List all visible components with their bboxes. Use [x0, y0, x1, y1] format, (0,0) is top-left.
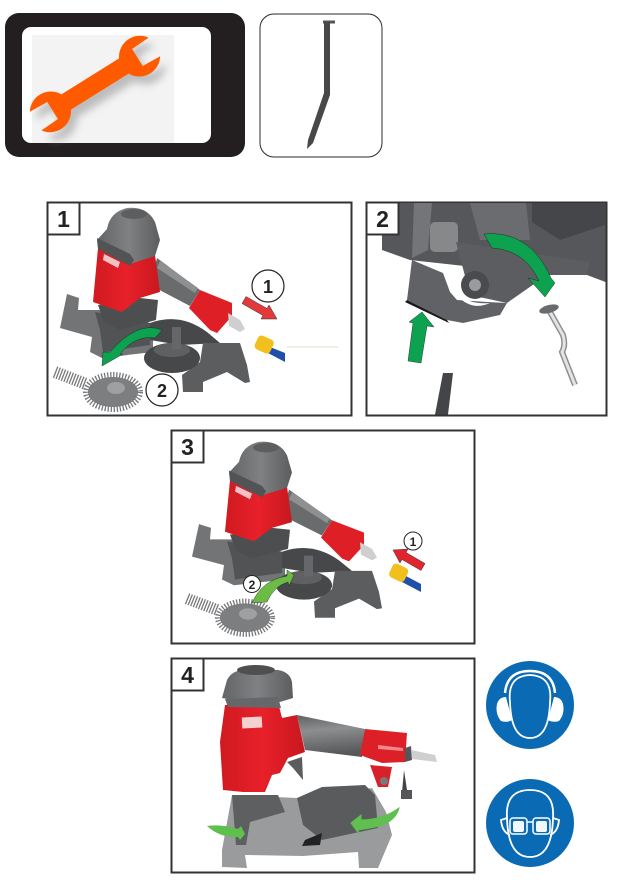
air hose connector — [388, 562, 421, 592]
step number 4: 4 — [181, 662, 194, 688]
step number 1 — [48, 202, 80, 234]
step number 2 — [366, 202, 398, 234]
callout 2: 2 — [157, 381, 167, 401]
arrow: green left latch — [207, 825, 245, 840]
illustration: tilted nailer with open magazine — [55, 208, 250, 409]
step number 2: 2 — [376, 206, 389, 232]
panel: step 1 — [48, 202, 352, 416]
panel: nail badge — [260, 14, 382, 157]
callout 2: 2 — [249, 578, 256, 592]
arrow: reconnect air red — [393, 549, 425, 570]
callout 2 — [244, 576, 260, 592]
callout 1 — [252, 270, 284, 302]
panel: wrench tool badge — [5, 13, 245, 157]
icon: ear protection sign — [486, 661, 574, 749]
arrow: green curved over lever — [484, 234, 555, 297]
panel: step 2 — [366, 202, 606, 416]
icon: eye protection sign — [486, 779, 574, 867]
icon: bent nail — [307, 20, 335, 149]
arrow: load coil green — [252, 570, 294, 603]
air hose connector — [253, 334, 285, 362]
illustration: feeder mechanism close-up — [382, 203, 606, 323]
arrow: disconnect air red — [242, 296, 277, 319]
icon: wrench — [25, 30, 171, 146]
icon: coil nail — [538, 303, 575, 385]
callout 1: 1 — [263, 277, 273, 297]
step number 3: 3 — [181, 434, 194, 460]
nail post — [435, 373, 453, 414]
arrow: green right latch — [351, 808, 399, 834]
illustration: nailer with coil being loaded — [187, 442, 382, 634]
panel: step 3 — [172, 430, 474, 644]
step number 3 — [172, 430, 204, 462]
arrow: remove coil green — [102, 328, 162, 366]
callout 2 — [146, 374, 178, 406]
panel: step 4 — [172, 658, 474, 872]
callout 1 — [404, 532, 422, 550]
step number 4 — [172, 658, 204, 690]
step number 1: 1 — [57, 206, 70, 232]
illustration: closed nailer side view — [220, 665, 437, 868]
arrow: green upward push — [408, 312, 434, 363]
callout 1: 1 — [410, 535, 417, 549]
